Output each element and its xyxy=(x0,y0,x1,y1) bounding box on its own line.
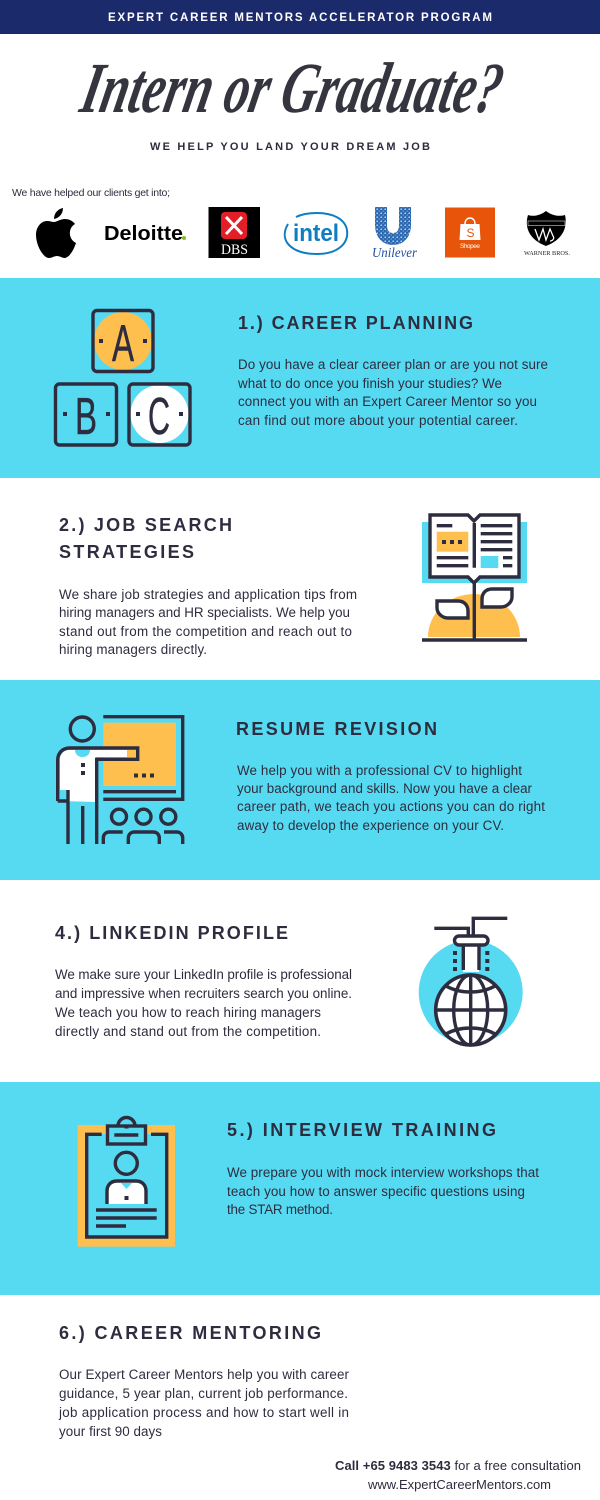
body: job search strategies: hiring managers and HR specialists. We help you xyxy=(59,605,350,620)
body: job search strategies xyxy=(59,587,357,657)
body: linkedin profile: directly and stand out from the competition. xyxy=(55,1024,321,1039)
icon: ABC blocks xyxy=(56,310,190,446)
icon: globe with connector xyxy=(419,918,523,1045)
heading: career mentoring: 6.) CAREER MENTORING xyxy=(59,1323,321,1343)
logo: Shopee: Shopee xyxy=(460,243,480,250)
body: resume revision: away to develop the experience on your CV. xyxy=(237,818,504,833)
logo: Unilever: Unilever xyxy=(372,246,418,261)
heading: resume revision: RESUME REVISION xyxy=(236,719,437,739)
body: career mentoring: Our Expert Career Mentors help you with career xyxy=(59,1367,350,1382)
panel: career planning xyxy=(0,278,600,478)
heading: job search strategies: 2.) JOB SEARCH xyxy=(59,515,232,535)
body: interview training xyxy=(227,1165,539,1217)
body: linkedin profile: We teach you how to reach hiring managers xyxy=(55,1005,321,1020)
heading: job search strategies: STRATEGIES xyxy=(59,542,194,562)
logo: Warner Bros: WARNER BROS. xyxy=(524,250,570,257)
body: job search strategies: hiring managers directly. xyxy=(59,642,207,657)
heading: interview training: 5.) INTERVIEW TRAINING xyxy=(227,1120,496,1140)
body: interview training: We prepare you with mock interview workshops that xyxy=(227,1165,539,1180)
panel: job search strategies xyxy=(59,515,527,657)
body: career planning: Do you have a clear career plan or are you not sure xyxy=(238,357,548,372)
logo: Intel: intel xyxy=(293,220,339,247)
logo: Unilever xyxy=(372,207,418,261)
panel: linkedin profile xyxy=(55,918,523,1045)
logo: Shopee: S xyxy=(466,226,475,240)
logo: Deloitte: Deloitte xyxy=(104,223,183,245)
body: linkedin profile: We make sure your LinkedIn profile is professional xyxy=(55,967,352,982)
heading: job search strategies xyxy=(59,515,232,562)
heading: career planning: 1.) CAREER PLANNING xyxy=(238,313,473,333)
body: linkedin profile: and impressive when recruiters search you online. xyxy=(55,986,352,1001)
client logos xyxy=(36,207,570,261)
panel: interview training xyxy=(0,1082,600,1295)
icon: ABC blocks: A xyxy=(112,315,134,373)
body: job search strategies: We share job strategies and application tips from xyxy=(59,587,357,602)
body: job search strategies: stand out from the competition and reach out to xyxy=(59,624,352,639)
panel: career mentoring xyxy=(58,1323,350,1439)
icon: clipboard with person xyxy=(78,1118,175,1247)
body: career mentoring: job application process and how to start well in xyxy=(58,1405,349,1420)
header banner xyxy=(0,0,600,34)
header banner: EXPERT CAREER MENTORS ACCELERATOR PROGRAM xyxy=(108,12,492,24)
body: career mentoring: guidance, 5 year plan, current job performance. xyxy=(59,1386,348,1401)
tagline: WE HELP YOU LAND YOUR DREAM JOB xyxy=(150,141,430,153)
logo: Shopee xyxy=(445,208,495,258)
body: resume revision: We help you with a professional CV to highlight xyxy=(237,763,522,778)
body: career mentoring xyxy=(58,1367,350,1439)
icon: open book plant xyxy=(422,515,527,640)
body: linkedin profile xyxy=(55,967,352,1039)
icon: presenter at board xyxy=(58,717,183,844)
body: career planning: connect you with an Expert Career Mentor so you xyxy=(238,394,537,409)
logo: Intel xyxy=(285,213,347,254)
logo: Apple xyxy=(36,208,76,258)
icon: ABC blocks: B xyxy=(75,388,97,446)
logo: DBS xyxy=(208,207,260,258)
body: resume revision: your background and skills. Now you have a clear xyxy=(237,781,533,796)
body: interview training: teach you how to answer specific questions using xyxy=(227,1184,525,1199)
footer contact: Call +65 9483 3543 for a free consultation xyxy=(335,1458,581,1473)
body: career planning: can find out more about your potential career. xyxy=(238,413,518,428)
footer contact: www.ExpertCareerMentors.com xyxy=(367,1477,551,1492)
body: resume revision: career path, we teach you actions you can do right xyxy=(237,799,545,814)
body: career planning xyxy=(237,357,548,428)
footer contact xyxy=(335,1458,581,1492)
panel: resume revision xyxy=(0,680,600,880)
logo: DBS: DBS xyxy=(221,242,248,258)
icon: ABC blocks: C xyxy=(148,388,170,446)
client intro text: We have helped our clients get into; xyxy=(12,187,170,199)
body: career planning: what to do once you finish your studies? We xyxy=(237,376,502,391)
body: resume revision xyxy=(237,763,545,833)
body: career mentoring: your first 90 days xyxy=(59,1424,162,1439)
logo: Warner Bros xyxy=(524,211,570,257)
body: interview training: the STAR method. xyxy=(227,1202,333,1217)
heading: linkedin profile: 4.) LINKEDIN PROFILE xyxy=(55,923,288,943)
